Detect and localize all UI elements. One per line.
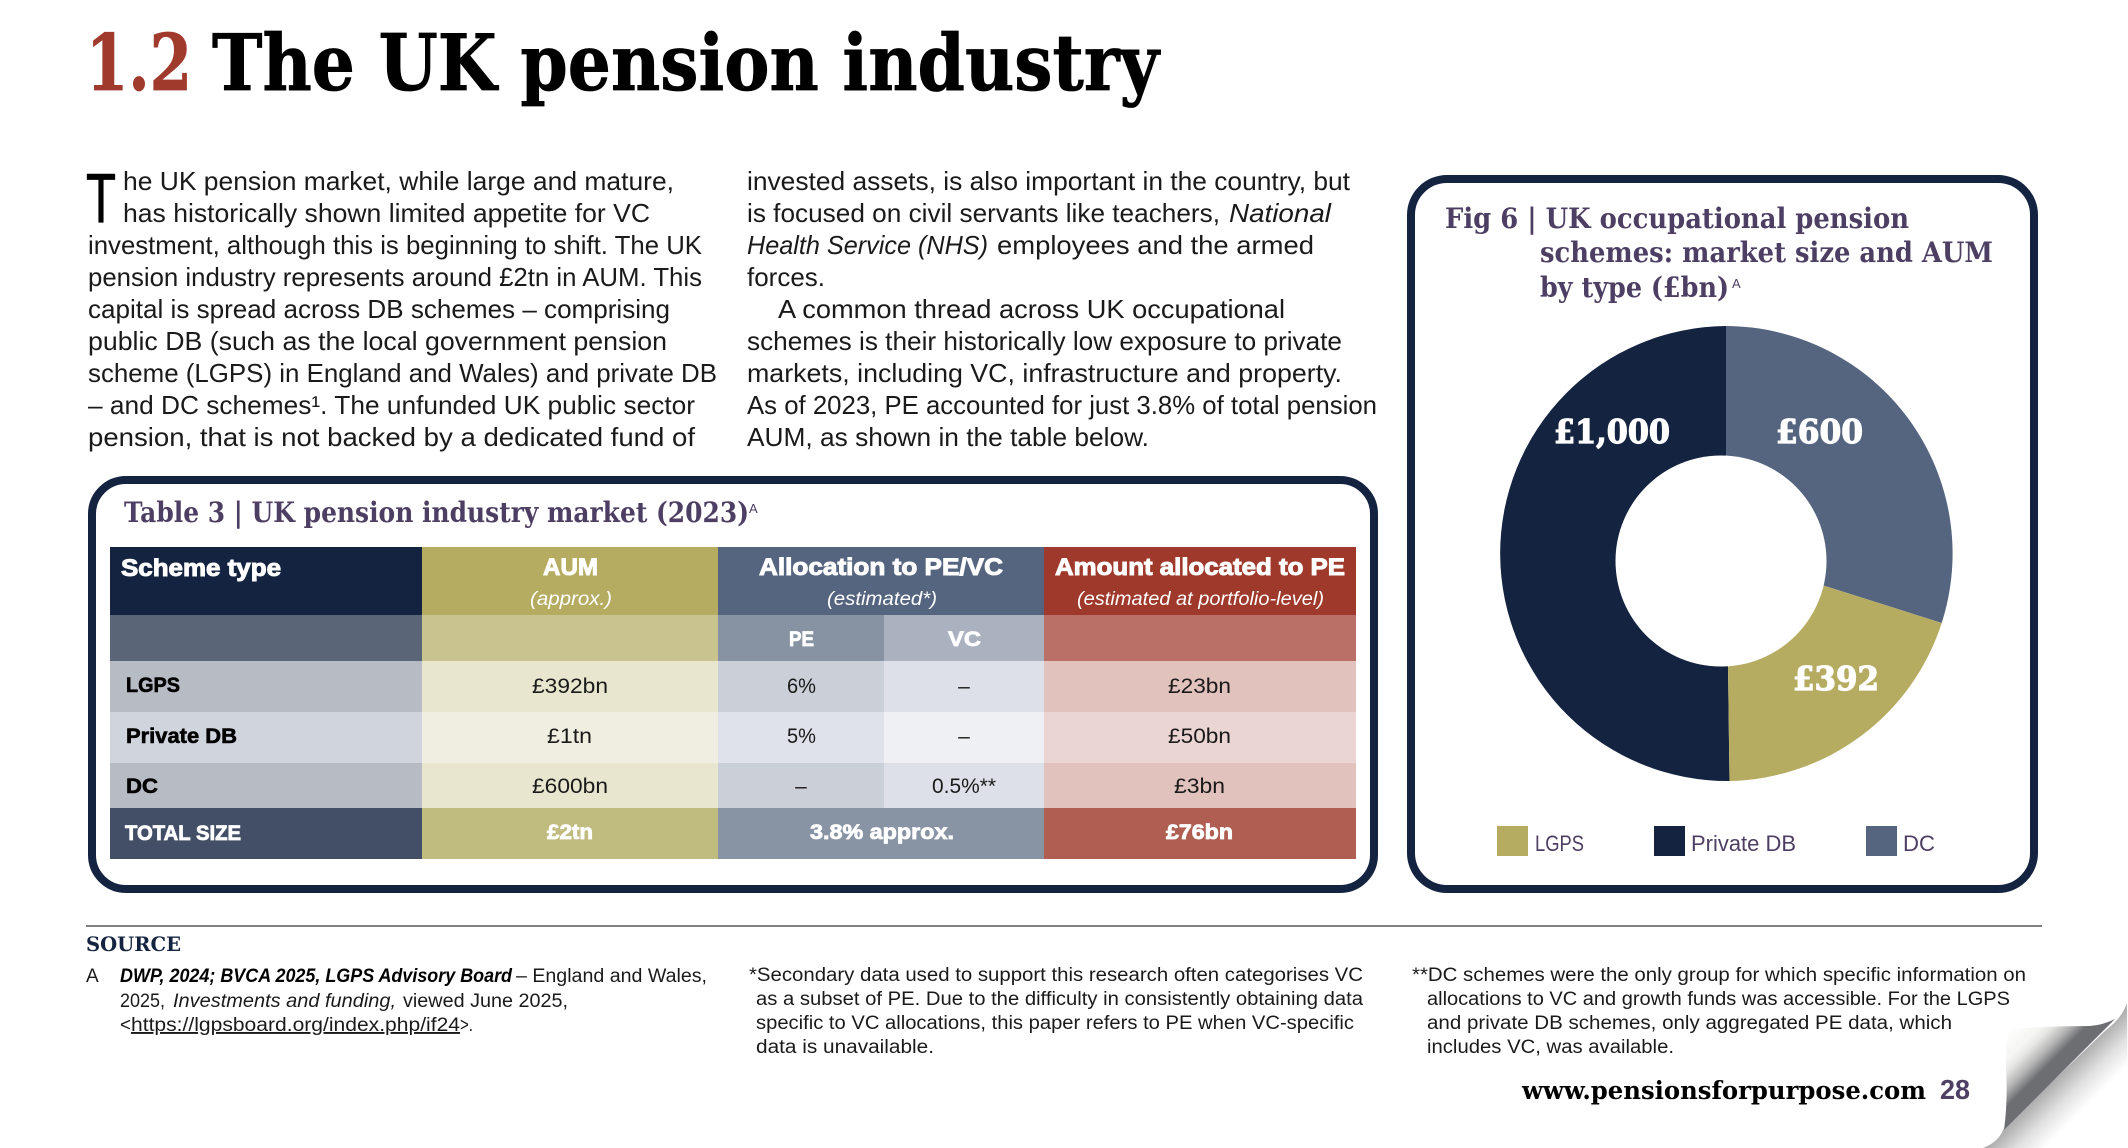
figure heading: A [1732, 276, 1741, 291]
text block: body column two: invested assets, is also important in the country, but [747, 166, 1351, 196]
donut chart [1500, 326, 1953, 781]
table row: LGPS: £392bn [532, 675, 608, 698]
table sub-header row: VC [948, 628, 981, 651]
curl shadow [1983, 1003, 2128, 1148]
table row: Private DB: 5% [787, 725, 816, 748]
text block: body column one: capital is spread across DB schemes – comprising [88, 294, 670, 324]
legend [1497, 826, 1935, 856]
table row: LGPS: £23bn [1168, 675, 1231, 698]
table row: DC: 0.5%** [932, 775, 996, 798]
table heading: Table 3 | UK pension industry market (2023) [124, 496, 749, 529]
table header row: (estimated*) [827, 589, 937, 610]
footnote: secondary data: *Secondary data used to support this research often categorises VC [749, 965, 1363, 986]
table row: total size [110, 808, 1356, 859]
footnote: source A: 2025, [120, 991, 165, 1012]
footnote: source A: https://lgpsboard.org/index.php/if24 [131, 1015, 460, 1036]
text block: body column two: A common thread across UK occupational [778, 294, 1285, 324]
table header row: Scheme type [121, 555, 281, 582]
table header row: Amount allocated to PE [1055, 554, 1345, 581]
table row: LGPS: 6% [787, 675, 816, 698]
value: DC: £600 [1776, 412, 1863, 451]
footnote: source A: Investments and funding, [173, 991, 396, 1012]
table row: total size: £2tn [547, 821, 593, 844]
table sub-header row: PE [789, 628, 814, 651]
figure heading: schemes: market size and AUM [1540, 236, 1993, 269]
value: Private DB: £1,000 [1554, 412, 1670, 451]
text block: body column two: National [1229, 198, 1332, 228]
icon: page curl [1983, 1003, 2128, 1148]
footnote: secondary data [749, 965, 1363, 1058]
text block: body column one: public DB (such as the local government pension [88, 326, 667, 356]
table row: DC: £600bn [532, 775, 608, 798]
text block: body column two: employees and the armed [997, 230, 1314, 260]
table row: Private DB: £50bn [1168, 725, 1231, 748]
footnote: secondary data: specific to VC allocations, this paper refers to PE when VC-specific [756, 1013, 1354, 1034]
legend: LGPS [1535, 831, 1584, 856]
text block: body column one: he UK pension market, while large and mature, [123, 166, 674, 196]
title: The UK pension industry [212, 18, 1161, 109]
figure heading: by type (£bn) [1540, 271, 1729, 304]
text block: body column two [747, 166, 1377, 452]
table header row: AUM [543, 554, 598, 581]
text block: body column one: has historically shown limited appetite for VC [123, 198, 650, 228]
table row: Private DB: £1tn [547, 725, 592, 748]
footnote: source A: A [86, 966, 99, 987]
footnote: source A: – England and Wales, [516, 966, 707, 987]
curl flap [2004, 1019, 2115, 1130]
table sub-header row [110, 615, 1356, 661]
text block: body column two: is focused on civil servants like teachers, [747, 198, 1220, 228]
drop cap: T [86, 159, 116, 237]
figure heading [1445, 202, 1993, 304]
table row: LGPS [110, 661, 1356, 712]
table row: Private DB: – [958, 725, 970, 748]
table row: DC: £3bn [1174, 775, 1225, 798]
text block: body column two: markets, including VC, infrastructure and property. [747, 358, 1342, 388]
table row: DC: – [795, 775, 807, 798]
table header row: (estimated at portfolio-level) [1077, 589, 1324, 610]
footnote: source A: >. [460, 1015, 473, 1036]
table row: Private DB [110, 712, 1356, 763]
table heading: A [749, 501, 758, 516]
table row: total size: £76bn [1166, 821, 1233, 844]
panel: table 3 [92, 480, 1374, 889]
footnote: DC schemes: allocations to VC and growth funds was accessible. For the LGPS [1427, 989, 2010, 1010]
table row: total size: 3.8% approx. [810, 821, 954, 844]
text block: body column one: investment, although this is beginning to shift. The UK [88, 230, 703, 260]
legend: DC [1903, 831, 1935, 856]
table row: DC [110, 763, 1356, 808]
table row: total size: TOTAL SIZE [125, 822, 241, 845]
donut hole [1616, 456, 1826, 666]
text block: body column one [86, 159, 717, 452]
footnote: DC schemes: **DC schemes were the only group for which specific information on [1412, 965, 2026, 986]
text block: body column one: scheme (LGPS) in England and Wales) and private DB [88, 358, 717, 388]
footnote: DC schemes: includes VC, was available. [1427, 1037, 1674, 1058]
footnote: source A [86, 966, 707, 1036]
panel frame [92, 480, 1374, 889]
text block: body column two: AUM, as shown in the table below. [747, 422, 1149, 452]
table header row: (approx.) [530, 589, 612, 610]
website address: www.pensionsforpurpose.com [1521, 1076, 1926, 1105]
text block: body column two: schemes is their historically low exposure to private [747, 326, 1342, 356]
source heading: SOURCE [86, 932, 181, 956]
figure heading: Fig 6 | UK occupational pension [1445, 202, 1909, 235]
table row: DC: DC [126, 775, 158, 798]
segment: LGPS [1728, 586, 1942, 781]
footnote: DC schemes: and private DB schemes, only aggregated PE data, which [1427, 1013, 1952, 1034]
table header row: Allocation to PE/VC [759, 554, 1003, 581]
table row: LGPS: LGPS [126, 674, 180, 697]
footnote: secondary data: data is unavailable. [756, 1037, 934, 1058]
table row: LGPS: – [958, 675, 970, 698]
footnote: source A: DWP, 2024; BVCA 2025, LGPS Advisory Board [120, 966, 512, 987]
text block: body column one: pension industry represents around £2tn in AUM. This [88, 262, 702, 292]
title: 1.2 [86, 18, 192, 109]
footnote: DC schemes [1412, 965, 2026, 1058]
page number: 28 [1940, 1074, 1970, 1105]
segment: Private DB [1500, 326, 1730, 781]
table header row [110, 547, 1356, 615]
text block: body column two: forces. [747, 262, 825, 292]
text block: body column two: As of 2023, PE accounted for just 3.8% of total pension [747, 390, 1377, 420]
table row: Private DB: Private DB [126, 725, 237, 748]
footnote: secondary data: as a subset of PE. Due to the difficulty in consistently obtaining data [756, 989, 1363, 1010]
segment: DC [1726, 326, 1953, 623]
panel: figure 6 [1411, 179, 2034, 889]
value: LGPS: £392 [1793, 659, 1879, 698]
text block: body column one: – and DC schemes¹. The unfunded UK public sector [88, 390, 695, 420]
panel frame [1411, 179, 2034, 889]
footnote: source A: viewed June 2025, [403, 991, 568, 1012]
text block: body column two: Health Service (NHS) [747, 230, 988, 260]
text block: body column one: pension, that is not backed by a dedicated fund of [88, 422, 696, 452]
footnote: source A: < [120, 1015, 131, 1036]
legend: Private DB [1691, 831, 1796, 856]
